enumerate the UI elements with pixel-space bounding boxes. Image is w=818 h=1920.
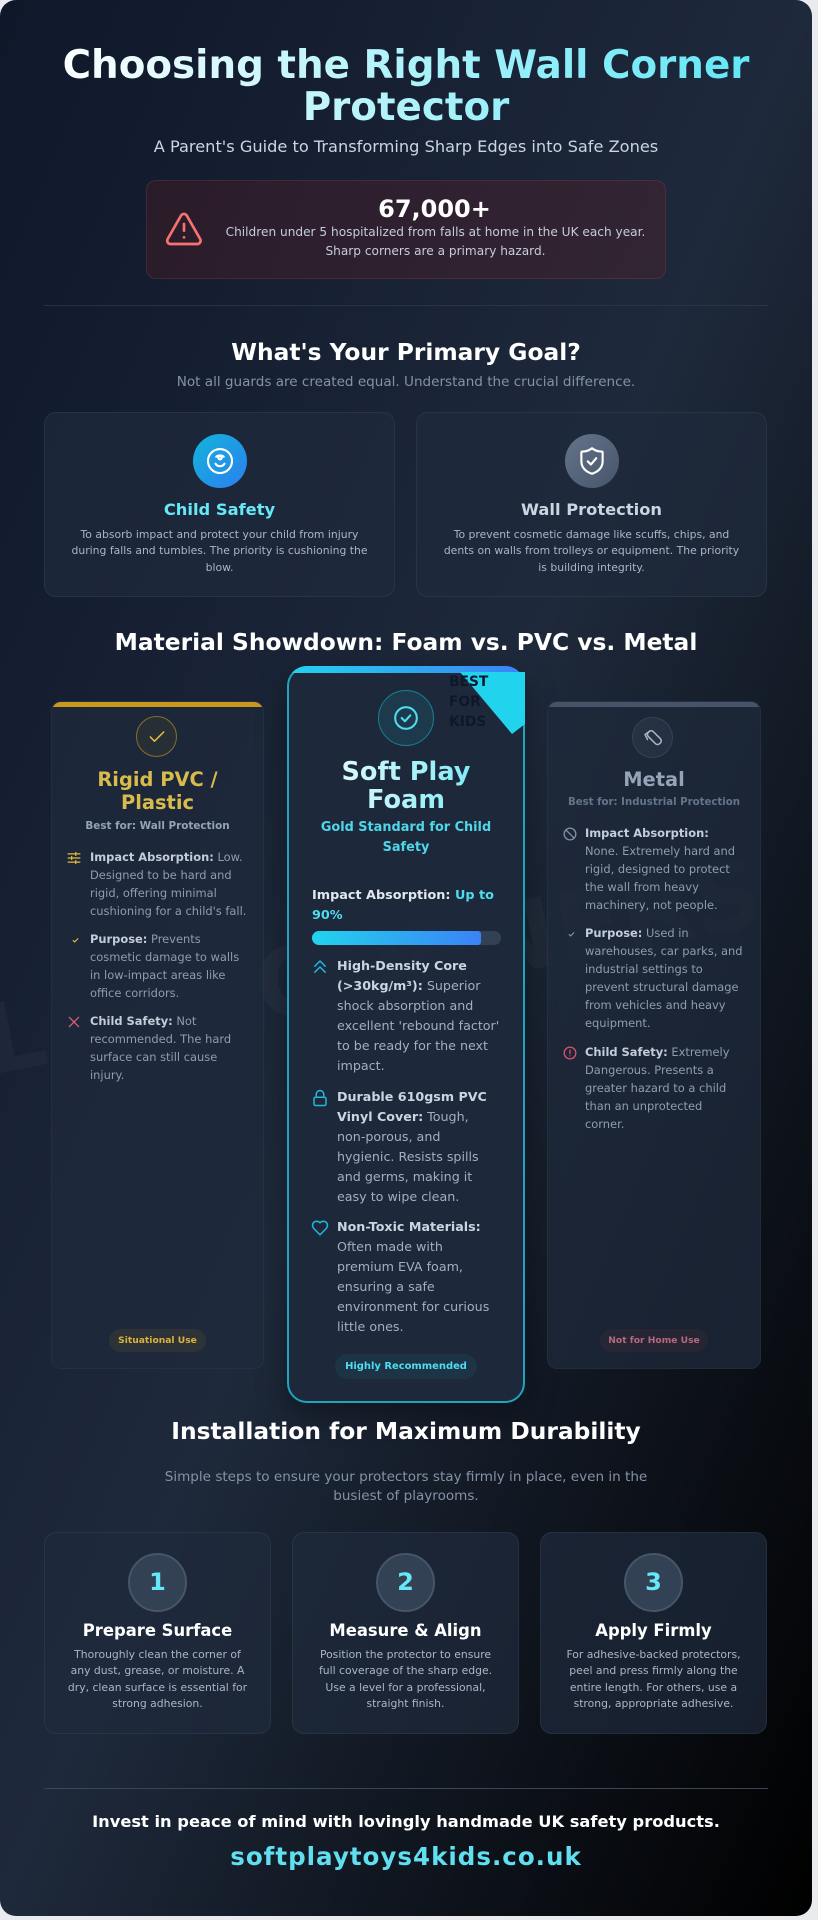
feature text: equipment. xyxy=(585,1016,651,1030)
feature text: hygienic. Resists spills xyxy=(337,1149,479,1164)
feature text xyxy=(90,1014,231,1082)
step description: strong adhesion. xyxy=(112,1697,203,1710)
feature text: Durable 610gsm PVC xyxy=(337,1089,487,1104)
step number 1 xyxy=(128,1553,187,1612)
progress bar: 90% xyxy=(312,931,501,945)
feature: child safety xyxy=(564,1045,730,1131)
section intro: installation: Simple steps to ensure your protectors stay firmly in place, even in the xyxy=(165,1469,647,1485)
feature text: rigid, offering minimal xyxy=(90,886,217,900)
feature text: Child Safety: Not xyxy=(90,1014,196,1028)
panel: hospitalisation statistic xyxy=(146,180,666,279)
step number 3: 3 xyxy=(645,1568,662,1596)
icon: warning triangle xyxy=(166,212,202,246)
title: Choosing the Right Wall Corner xyxy=(63,43,749,88)
goal title: child safety: Child Safety xyxy=(164,500,275,519)
feature: purpose xyxy=(72,932,239,1000)
goal description: wall protection: dents on walls from trolleys or equipment. The priority xyxy=(444,544,739,557)
card subtitle: gold standard: Safety xyxy=(383,840,429,855)
feature text xyxy=(585,826,735,912)
feature text xyxy=(337,1089,487,1204)
title: Protector xyxy=(303,85,509,130)
subtitle: A Parent's Guide to Transforming Sharp Edges into Safe Zones xyxy=(154,137,658,156)
feature text: prevent structural damage xyxy=(585,980,739,994)
feature text: and germs, making it xyxy=(337,1169,472,1184)
footer website: softplaytoys4kids.co.uk xyxy=(230,1842,582,1871)
ribbon: best for kids: BEST xyxy=(449,674,488,690)
step description: full coverage of the sharp edge. xyxy=(319,1664,492,1677)
panel: step 3 xyxy=(540,1532,767,1734)
feature text xyxy=(337,958,499,1073)
heading: material showdown: Material Showdown: Foam vs. PVC vs. Metal xyxy=(115,628,697,656)
goal description: wall protection: is building integrity. xyxy=(538,561,645,574)
feature text xyxy=(90,932,239,1000)
feature text: Impact Absorption: Low. xyxy=(90,850,243,864)
goal description: wall protection xyxy=(444,528,739,574)
feature text xyxy=(337,1219,489,1334)
icon: prohibited xyxy=(564,828,576,840)
feature text: (>30kg/m³): Superior xyxy=(337,978,480,993)
panel: metal card xyxy=(547,701,761,1369)
icon: double chevron xyxy=(314,960,326,973)
panel: step 1 xyxy=(44,1532,271,1734)
card title: metal: Metal xyxy=(623,768,685,791)
feature: child safety xyxy=(68,1014,231,1082)
feature: impact absorption xyxy=(564,826,735,912)
feature text: Impact Absorption: xyxy=(585,826,709,840)
feature text: environment for curious xyxy=(337,1299,489,1314)
step description xyxy=(68,1648,248,1710)
card title: soft play foam xyxy=(289,759,523,814)
impact absorption label: Impact Absorption: Up to xyxy=(312,888,494,903)
feature text: than an unprotected xyxy=(585,1099,702,1113)
card title: rigid PVC xyxy=(97,768,218,814)
footer tagline: Invest in peace of mind with lovingly handmade UK safety products. xyxy=(92,1812,720,1831)
step title: Measure & Align xyxy=(329,1621,482,1640)
card title: rigid PVC: Rigid PVC / xyxy=(97,768,218,791)
feature text: corner. xyxy=(585,1117,624,1131)
feature text: Non-Toxic Materials: xyxy=(337,1219,481,1234)
feature: purpose xyxy=(568,926,743,1030)
goal title: wall protection: Wall Protection xyxy=(521,500,662,519)
feature text: Purpose: Used in xyxy=(585,926,689,940)
icon: foam check circle xyxy=(378,690,434,746)
impact absorption label: 90% xyxy=(312,908,343,923)
text: CORNERS xyxy=(245,836,772,1045)
icon: small check xyxy=(568,932,574,937)
feature: high-density core xyxy=(314,958,499,1073)
step number 3 xyxy=(624,1553,683,1612)
ribbon: best for kids: KIDS xyxy=(449,714,486,730)
step description xyxy=(319,1648,492,1710)
card title: soft play foam: Foam xyxy=(367,785,445,815)
feature text: None. Extremely hard and xyxy=(585,844,735,858)
step description: Use a level for a professional, xyxy=(325,1681,486,1694)
goal description: child safety: during falls and tumbles. The priority is cushioning the xyxy=(72,544,368,557)
goal description: child safety: blow. xyxy=(206,561,233,574)
card title: rigid PVC: Plastic xyxy=(121,791,194,814)
feature text: greater hazard to a child xyxy=(585,1081,726,1095)
heading: installation: Installation for Maximum Durability xyxy=(171,1417,641,1445)
icon: cross xyxy=(68,1016,80,1028)
feature text: shock absorption and xyxy=(337,998,473,1013)
icon: wrench xyxy=(632,717,673,758)
feature text: injury. xyxy=(90,1068,124,1082)
feature text: Often made with xyxy=(337,1239,443,1254)
step description: straight finish. xyxy=(367,1697,444,1710)
feature text: in low-impact areas like xyxy=(90,968,225,982)
feature text: warehouses, car parks, and xyxy=(585,944,743,958)
feature text: impact. xyxy=(337,1058,385,1073)
step title: Apply Firmly xyxy=(595,1621,712,1640)
feature text: industrial settings to xyxy=(585,962,703,976)
step description: any dust, grease, or moisture. A xyxy=(71,1664,244,1677)
icon: baby face xyxy=(193,434,247,488)
title xyxy=(44,45,768,129)
heading: primary goal: What's Your Primary Goal? xyxy=(231,338,581,366)
step number 2 xyxy=(376,1553,435,1612)
feature text: surface can still cause xyxy=(90,1050,217,1064)
card subtitle: wall protection: Best for: Wall Protection xyxy=(85,820,230,832)
panel: step 2 xyxy=(292,1532,519,1734)
step description: For adhesive-backed protectors, xyxy=(566,1648,741,1661)
feature text: recommended. The hard xyxy=(90,1032,231,1046)
feature: non-toxic materials xyxy=(312,1219,489,1334)
step description: Position the protector to ensure xyxy=(320,1648,491,1661)
card subtitle: gold standard xyxy=(321,820,491,855)
feature text: Child Safety: Extremely xyxy=(585,1045,729,1059)
step description: strong, appropriate adhesive. xyxy=(574,1697,733,1710)
feature text: ensuring a safe xyxy=(337,1279,435,1294)
icon: PVC check xyxy=(136,716,177,757)
feature text: the wall from heavy xyxy=(585,880,699,894)
icon: small check xyxy=(72,938,78,943)
feature text: Dangerous. Presents a xyxy=(585,1063,714,1077)
feature text: little ones. xyxy=(337,1319,404,1334)
step description: Thoroughly clean the corner of xyxy=(74,1648,241,1661)
feature text: excellent 'rebound factor' xyxy=(337,1018,499,1033)
statistic description: Sharp corners are a primary hazard. xyxy=(325,244,546,258)
badge: situational use: Situational Use xyxy=(118,1335,197,1346)
statistic number: 67,000+ xyxy=(378,195,491,223)
section intro: installation xyxy=(165,1469,647,1504)
step description: peel and press firmly along the xyxy=(569,1664,738,1677)
feature text: Vinyl Cover: Tough, xyxy=(337,1109,469,1124)
step number 1: 1 xyxy=(149,1568,166,1596)
step description: entire length. For others, use a xyxy=(570,1681,737,1694)
card title: soft play foam: Soft Play xyxy=(342,757,470,787)
panel: wall protection goal xyxy=(416,412,767,597)
icon: lock xyxy=(313,1090,327,1106)
goal description: child safety xyxy=(72,528,368,574)
feature: impact absorption xyxy=(68,850,246,918)
statistic description xyxy=(226,225,645,258)
icon: heart xyxy=(312,1220,328,1236)
feature text: easy to wipe clean. xyxy=(337,1189,459,1204)
feature text: cushioning for a child's fall. xyxy=(90,904,246,918)
feature text: non-porous, and xyxy=(337,1129,440,1144)
feature text: from vehicles and heavy xyxy=(585,998,726,1012)
step number 2: 2 xyxy=(397,1568,414,1596)
goal description: child safety: To absorb impact and protect your child from injury xyxy=(81,528,358,541)
statistic description: Children under 5 hospitalized from falls at home in the UK each year. xyxy=(226,225,645,239)
feature text xyxy=(585,926,743,1030)
feature text xyxy=(585,1045,730,1131)
icon: alert circle xyxy=(564,1046,576,1060)
feature text: High-Density Core xyxy=(337,958,467,973)
ribbon: best for kids xyxy=(449,672,525,734)
step title: Prepare Surface xyxy=(83,1621,232,1640)
feature text: machinery, not people. xyxy=(585,898,718,912)
feature: vinyl cover xyxy=(313,1089,487,1204)
section intro: installation: busiest of playrooms. xyxy=(333,1488,479,1504)
feature text: Purpose: Prevents xyxy=(90,932,201,946)
panel: rigid PVC card xyxy=(51,701,264,1369)
ribbon: best for kids: FOR xyxy=(449,694,481,710)
badge: situational use xyxy=(109,1329,206,1352)
feature text: rigid, designed to protect xyxy=(585,862,730,876)
feature text: to be ready for the next xyxy=(337,1038,488,1053)
card subtitle: gold standard: Gold Standard for Child xyxy=(321,820,491,835)
feature text: cosmetic damage to walls xyxy=(90,950,239,964)
step description xyxy=(566,1648,741,1710)
badge: not for home use xyxy=(600,1329,708,1352)
panel: soft play foam card xyxy=(287,666,525,1403)
section intro: primary goal: Not all guards are created equal. Understand the crucial difference. xyxy=(177,374,635,390)
feature text: premium EVA foam, xyxy=(337,1259,463,1274)
badge: highly recommended xyxy=(335,1354,477,1379)
feature text xyxy=(90,850,246,918)
feature text: office corridors. xyxy=(90,986,179,1000)
goal description: wall protection: To prevent cosmetic damage like scuffs, chips, and xyxy=(454,528,729,541)
feature text: Designed to be hard and xyxy=(90,868,232,882)
badge: not for home use: Not for Home Use xyxy=(608,1335,700,1346)
card subtitle: industrial protection: Best for: Industrial Protection xyxy=(568,797,740,808)
badge: highly recommended: Highly Recommended xyxy=(345,1361,467,1372)
icon: shield check xyxy=(565,434,619,488)
step description: dry, clean surface is essential for xyxy=(68,1681,247,1694)
panel: child safety goal xyxy=(44,412,395,597)
impact absorption label xyxy=(312,888,494,923)
icon: sliders xyxy=(68,852,80,864)
